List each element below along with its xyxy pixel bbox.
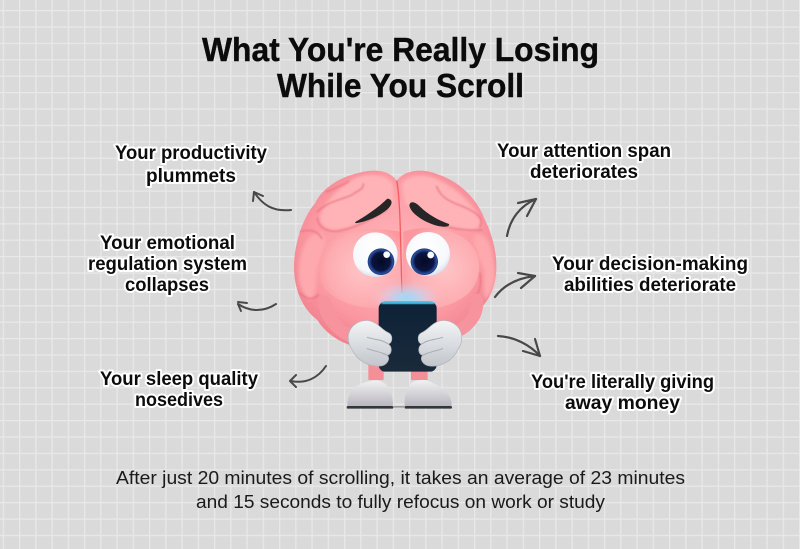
bottom statement [116,467,685,512]
label: attention span [497,141,671,183]
arrow: to sleep quality [290,366,326,387]
label: sleep quality [100,369,258,411]
brain body [294,171,496,345]
label: money: away money [565,393,680,414]
label: productivity: Your productivity [115,143,267,164]
title: What You're Really Losing [202,31,599,68]
label: decision making: Your decision-making [552,254,748,275]
bottom statement: After just 20 minutes of scrolling, it takes an average of 23 minutes [116,467,685,488]
label: attention span: Your attention span [497,141,671,162]
label: decision making: abilities deteriorate [564,275,736,296]
label: emotional regulation: collapses [125,275,209,296]
label: emotional regulation: regulation system [88,254,247,275]
hand left [348,320,392,366]
legs [368,363,428,380]
brain folds [300,182,482,300]
screen glow [372,282,442,315]
label: decision making [552,254,748,296]
arrow: to productivity [253,192,291,210]
title: While You Scroll [277,67,524,104]
label: productivity [115,143,267,187]
eye left [353,232,398,277]
label: money: You're literally giving [531,372,714,393]
label: money [531,372,714,414]
label: productivity: plummets [146,166,236,187]
arms [325,300,477,337]
arrow: to attention span [507,199,536,236]
label: sleep quality: nosedives [135,390,223,411]
label: attention span: deteriorates [530,162,638,183]
label: sleep quality: Your sleep quality [100,369,258,390]
hand right [418,320,462,366]
shoes [347,380,452,409]
arrow: to money [498,336,540,356]
arrow: to emotional regulation [238,302,276,311]
title [202,31,599,104]
cheeks [319,229,401,309]
eye right [406,232,450,276]
eyebrows [355,199,449,227]
label: emotional regulation [88,233,247,296]
phone [379,302,437,372]
arrow: to decision making [495,273,535,297]
brain character [294,171,496,409]
centre fissure [397,181,402,293]
label: emotional regulation: Your emotional [100,233,235,254]
bottom statement: and 15 seconds to fully refocus on work or study [196,491,606,512]
brain lobes [299,175,495,300]
